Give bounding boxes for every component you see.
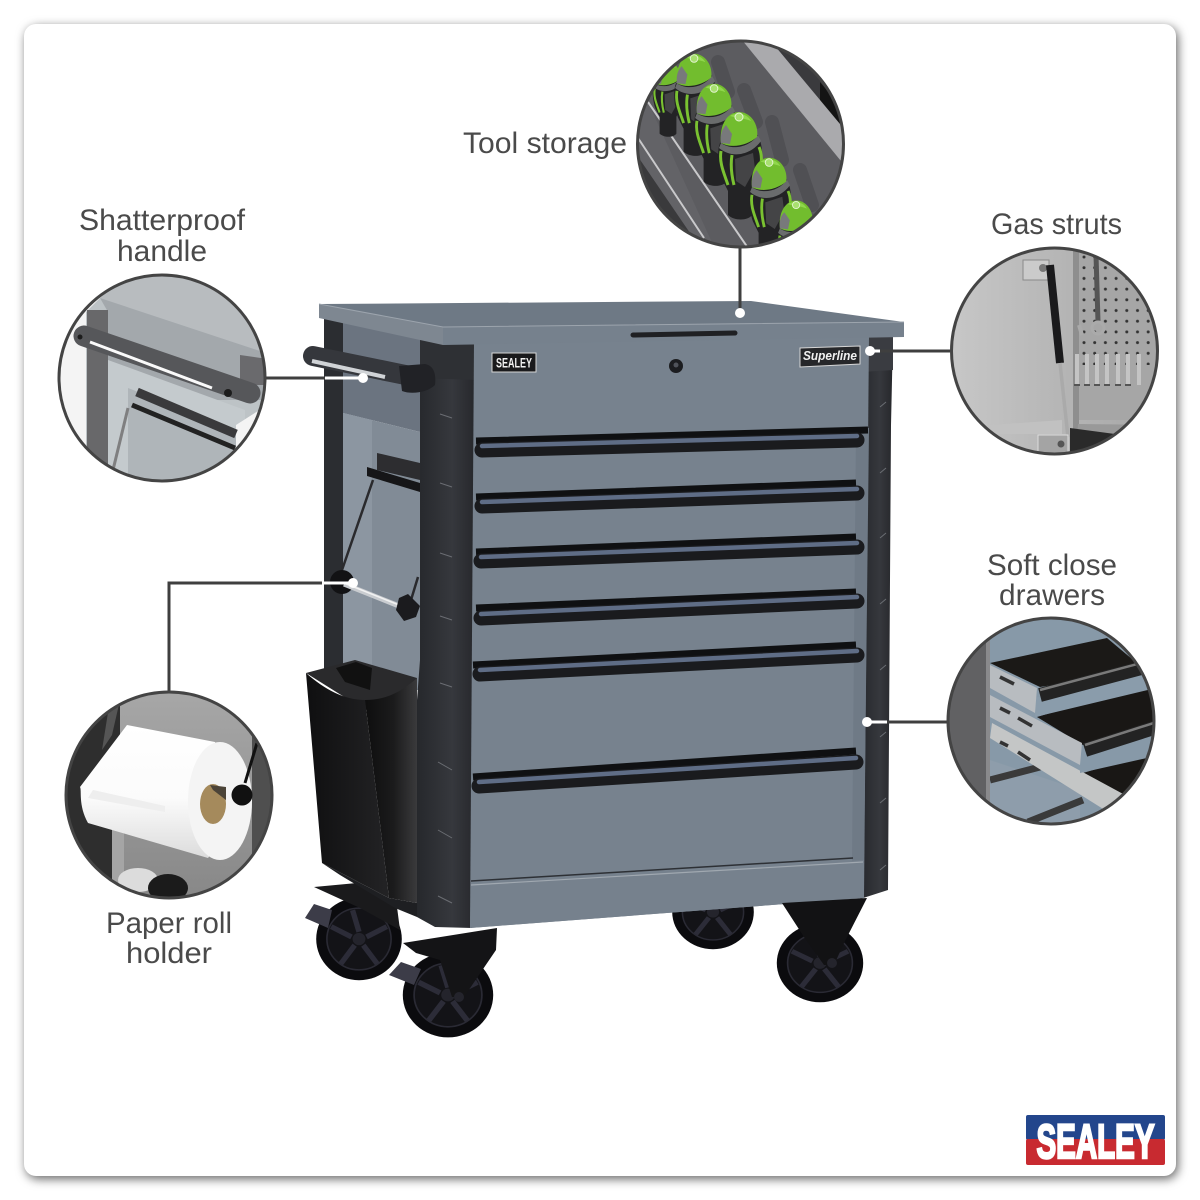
side panel upper [343, 320, 420, 432]
leader line: Paper roll holder [169, 583, 353, 692]
gas strut rod [1060, 363, 1068, 437]
title label: Soft close drawers [987, 549, 1117, 612]
bottom bracket [1038, 435, 1068, 455]
dark side panel [68, 706, 120, 879]
gas strut body [1050, 265, 1060, 363]
black slot [820, 82, 840, 124]
detail circle: shatterproof handle [58, 274, 266, 482]
screwdrivers [652, 54, 812, 244]
bottom drawer shadow [471, 858, 853, 881]
tool trolley illustration [305, 301, 904, 1037]
divider strip [1073, 245, 1079, 435]
rear left caster [305, 883, 402, 980]
right leg [860, 335, 893, 899]
leader line: Gas struts [870, 350, 950, 352]
top bracket [1023, 260, 1049, 280]
slide slots [1000, 677, 1032, 760]
title label: Paper roll holder: holder [126, 937, 212, 970]
leg [87, 310, 108, 464]
pegboard [1079, 252, 1107, 420]
title label: Soft close drawers: Soft close [987, 549, 1117, 582]
chassis bottom side [322, 863, 417, 917]
side storage bin [306, 660, 417, 903]
side bracket rails [342, 453, 420, 600]
slide 3 [990, 723, 1125, 812]
SEALEY badge [492, 353, 536, 372]
socket tips [1077, 384, 1128, 386]
Superline Pro badge [800, 346, 860, 367]
base plinth [470, 860, 864, 928]
sockets [1077, 354, 1139, 385]
title label: Soft close drawers: drawers [999, 579, 1105, 612]
drawer 2 handle [1085, 726, 1160, 750]
silver strip [744, 42, 842, 160]
lid top [50, 265, 275, 356]
right leg cap [862, 335, 893, 372]
drawer 1 handle [1040, 667, 1145, 695]
paper roll holder rod and knobs [330, 570, 420, 621]
right front strip [852, 428, 869, 862]
Superline Pro badge: Superline [803, 348, 857, 363]
inner panel [108, 360, 217, 400]
side handle [312, 356, 435, 393]
drawer 3 [1083, 750, 1160, 800]
title label: Paper roll holder [106, 907, 232, 970]
side panel interior [343, 413, 420, 690]
slide 1 [990, 665, 1037, 713]
bottom tray [630, 102, 720, 260]
light stripe [112, 830, 124, 884]
lower background [990, 760, 1080, 830]
upper dark corner [102, 707, 118, 750]
right column [252, 736, 270, 854]
side band [100, 298, 263, 400]
handle bar [84, 336, 250, 393]
title label: Shatterproof handle: Shatterproof [79, 204, 246, 237]
rear caster wheel [672, 875, 754, 949]
knob [232, 784, 252, 806]
title label: Gas struts: Gas struts [991, 208, 1122, 241]
lid handle [633, 333, 735, 335]
tray shadow [640, 160, 689, 232]
drawer rails [479, 436, 857, 786]
title label: Tool storage: Tool storage [463, 127, 627, 160]
back panel [778, 50, 826, 100]
cabinet leg [940, 610, 986, 835]
plinth highlight [471, 862, 863, 885]
base [1040, 420, 1062, 434]
title label: Paper roll holder: Paper roll [106, 907, 232, 940]
left leg cap [420, 338, 476, 380]
paper roll [80, 725, 252, 860]
callout dots [348, 308, 875, 727]
tray edges [638, 102, 748, 248]
white outside area left [60, 296, 102, 445]
SEALEY badge: SEALEY [496, 354, 532, 370]
detail circle: gas struts [950, 246, 1159, 456]
strap [245, 743, 257, 783]
drawer 2 front [1080, 730, 1160, 773]
bracket rails [137, 392, 236, 434]
leader line: Shatterproof handle [265, 376, 363, 380]
front right caster [777, 898, 867, 1002]
handle light strip [90, 342, 212, 388]
leader line: Soft close drawers [867, 720, 948, 724]
left front leg [417, 338, 476, 928]
slide 2 [990, 695, 1082, 765]
leader line: Tool storage [738, 248, 742, 313]
title label: Shatterproof handle [79, 204, 246, 268]
detail circle: soft close drawers [940, 610, 1165, 835]
drawer gap shadows [473, 430, 868, 777]
screw holes [78, 334, 82, 340]
worktop lid [319, 301, 904, 345]
front left caster [389, 928, 497, 1037]
detail circle: paper roll holder [64, 690, 274, 900]
detail circle: tool storage screwdrivers [636, 40, 845, 248]
corner block [240, 355, 264, 385]
lower rails [990, 767, 1083, 822]
rod [113, 408, 128, 470]
leg chevrons [438, 402, 886, 903]
drawer 2 [1037, 680, 1160, 745]
drawer 1 front [1035, 662, 1160, 717]
bottom caps [118, 868, 158, 892]
white sections of leader lines [322, 351, 887, 722]
spanners [1096, 255, 1098, 322]
drawer 1 [990, 638, 1145, 687]
back leg [324, 318, 343, 682]
wall shadows [718, 62, 812, 205]
interior light strip [343, 413, 372, 690]
leg edge [986, 640, 990, 835]
lock [669, 359, 683, 373]
white outside area right [236, 411, 258, 448]
cabinet front face [470, 335, 869, 928]
title label: Shatterproof handle: handle [117, 235, 207, 268]
